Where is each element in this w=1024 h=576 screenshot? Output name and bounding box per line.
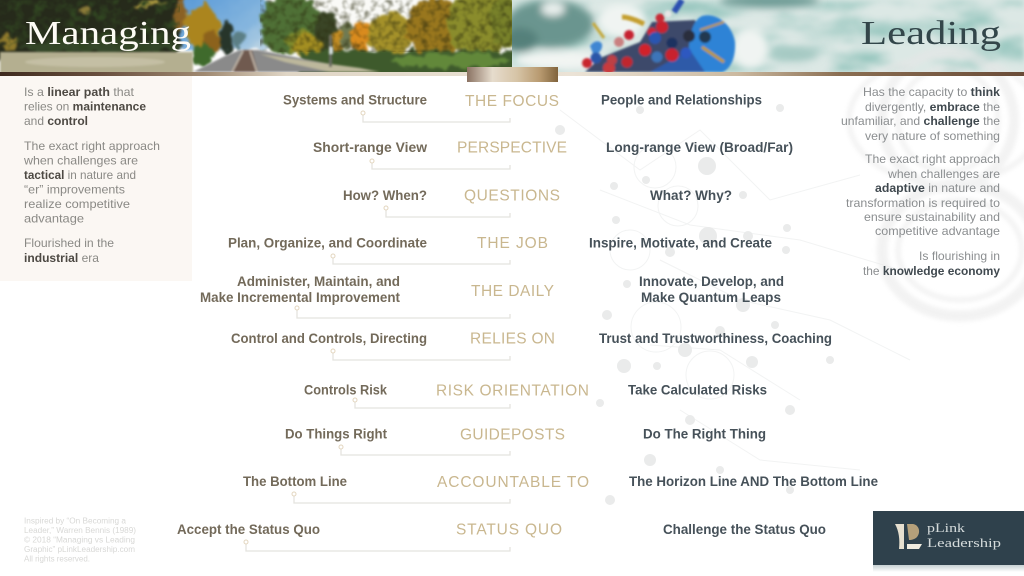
text block: managing description — [23, 85, 160, 265]
text block: leading description: divergently, embrace the — [865, 100, 1000, 114]
photo: railway through autumn forest — [0, 0, 512, 72]
text block: managing description: “er” improvements — [24, 182, 125, 196]
network background — [555, 104, 910, 505]
row: risk orientation: Take Calculated Risks — [628, 382, 767, 398]
footnote: credits — [24, 516, 136, 564]
text block: managing description: when challenges are — [23, 154, 138, 168]
row: status quo: STATUS QUO — [456, 522, 562, 538]
text block: leading description: the knowledge economy — [863, 264, 1000, 278]
row: the daily: Make Incremental Improvement — [200, 290, 400, 305]
text block: leading description: adaptive in nature and — [875, 181, 1000, 195]
icon: pLink monogram — [895, 524, 922, 549]
text block: managing description: and control — [24, 114, 88, 128]
text block: leading description: The exact right approach — [865, 152, 1000, 166]
row: questions: How? When? — [343, 188, 427, 203]
text block: leading description: competitive advantage — [875, 224, 1000, 238]
row: guideposts: Do Things Right — [285, 426, 387, 442]
row: perspective: Short-range View — [313, 140, 428, 155]
row: the job — [228, 235, 772, 264]
footnote: credits: © 2018 “Managing vs Leading — [24, 536, 135, 544]
logo block: pLink Leadership: Leadership — [927, 535, 1001, 550]
row: accountable to: ACCOUNTABLE TO — [437, 474, 589, 491]
row: the focus: THE FOCUS — [465, 93, 559, 110]
text block: managing description: Is a linear path that — [24, 85, 135, 99]
row: the daily: Innovate, Develop, and — [639, 274, 784, 289]
row: questions: What? Why? — [650, 188, 732, 203]
photo: white-water rafting — [502, 0, 1024, 74]
row: relies on: Trust and Trustworthiness, Coaching — [599, 331, 832, 346]
text block: leading description: very nature of something — [865, 129, 1000, 143]
row: guideposts — [285, 426, 766, 455]
row: risk orientation: Controls Risk — [304, 382, 387, 398]
row: perspective: PERSPECTIVE — [457, 140, 567, 156]
row: perspective — [313, 140, 793, 169]
row: the job: Inspire, Motivate, and Create — [589, 236, 772, 250]
decorative rings behind leading text — [849, 52, 1024, 316]
logo block: pLink Leadership — [873, 511, 1024, 572]
row: the focus — [283, 92, 762, 122]
text block: leading description: ensure sustainability and — [864, 210, 1000, 224]
text block: leading description: Has the capacity to think — [863, 85, 1000, 99]
row: accountable to: The Bottom Line — [243, 474, 347, 489]
text block: managing description: The exact right approach — [24, 139, 160, 153]
row: the daily: Administer, Maintain, and — [237, 274, 400, 289]
row: the daily — [200, 274, 784, 318]
text block: leading description: when challenges are — [887, 167, 1000, 181]
panel: managing summary background — [0, 76, 192, 281]
row: risk orientation — [304, 382, 767, 408]
text block: leading description: transformation is required to — [846, 196, 1000, 210]
row: guideposts: GUIDEPOSTS — [460, 426, 565, 444]
title: Managing: Managing — [25, 15, 191, 52]
footnote: credits: Graphic” pLinkLeadership.com — [24, 545, 135, 554]
text block: leading description: Is flourishing in — [919, 249, 1000, 263]
row: questions — [343, 188, 732, 217]
center tab — [467, 67, 558, 82]
row: the daily: Make Quantum Leaps — [641, 290, 781, 305]
text block: managing description: tactical in nature and — [24, 168, 136, 182]
text block: managing description: Flourished in the — [24, 236, 114, 250]
row: status quo: Challenge the Status Quo — [663, 522, 826, 537]
text block: managing description: realize competitive — [24, 197, 130, 211]
footnote: credits: Leader,” Warren Bennis (1989) — [24, 526, 136, 535]
row: the job: Plan, Organize, and Coordinate — [228, 236, 427, 250]
row: the daily: THE DAILY — [471, 283, 554, 300]
row: accountable to: The Horizon Line AND The Bottom Line — [629, 474, 878, 489]
text block: managing description: advantage — [24, 212, 84, 226]
row: the job: THE JOB — [477, 235, 548, 252]
title: Leading: Leading — [861, 15, 1001, 52]
footnote: credits: Inspired by “On Becoming a — [24, 516, 127, 526]
text block: managing description: relies on maintenance — [24, 100, 146, 114]
text block: managing description: industrial era — [24, 251, 99, 265]
row: relies on — [231, 330, 832, 360]
row: the focus: Systems and Structure — [283, 92, 427, 108]
row: relies on: RELIES ON — [470, 330, 555, 348]
row: risk orientation: RISK ORIENTATION — [436, 382, 589, 400]
footnote: credits: All rights reserved. — [24, 554, 90, 564]
header gradient rule — [0, 72, 1024, 76]
row: the focus: People and Relationships — [601, 92, 762, 108]
row: relies on: Control and Controls, Directing — [231, 331, 427, 346]
text block: leading description: unfamiliar, and challenge the — [841, 114, 1000, 128]
logo block: pLink Leadership: pLink — [927, 520, 966, 535]
row: questions: QUESTIONS — [464, 188, 560, 204]
row: status quo: Accept the Status Quo — [177, 522, 320, 537]
row: status quo — [177, 522, 826, 551]
text block: leading description — [841, 85, 1000, 278]
row: accountable to — [243, 474, 878, 503]
row: perspective: Long-range View (Broad/Far) — [606, 140, 793, 155]
row: guideposts: Do The Right Thing — [643, 426, 766, 442]
